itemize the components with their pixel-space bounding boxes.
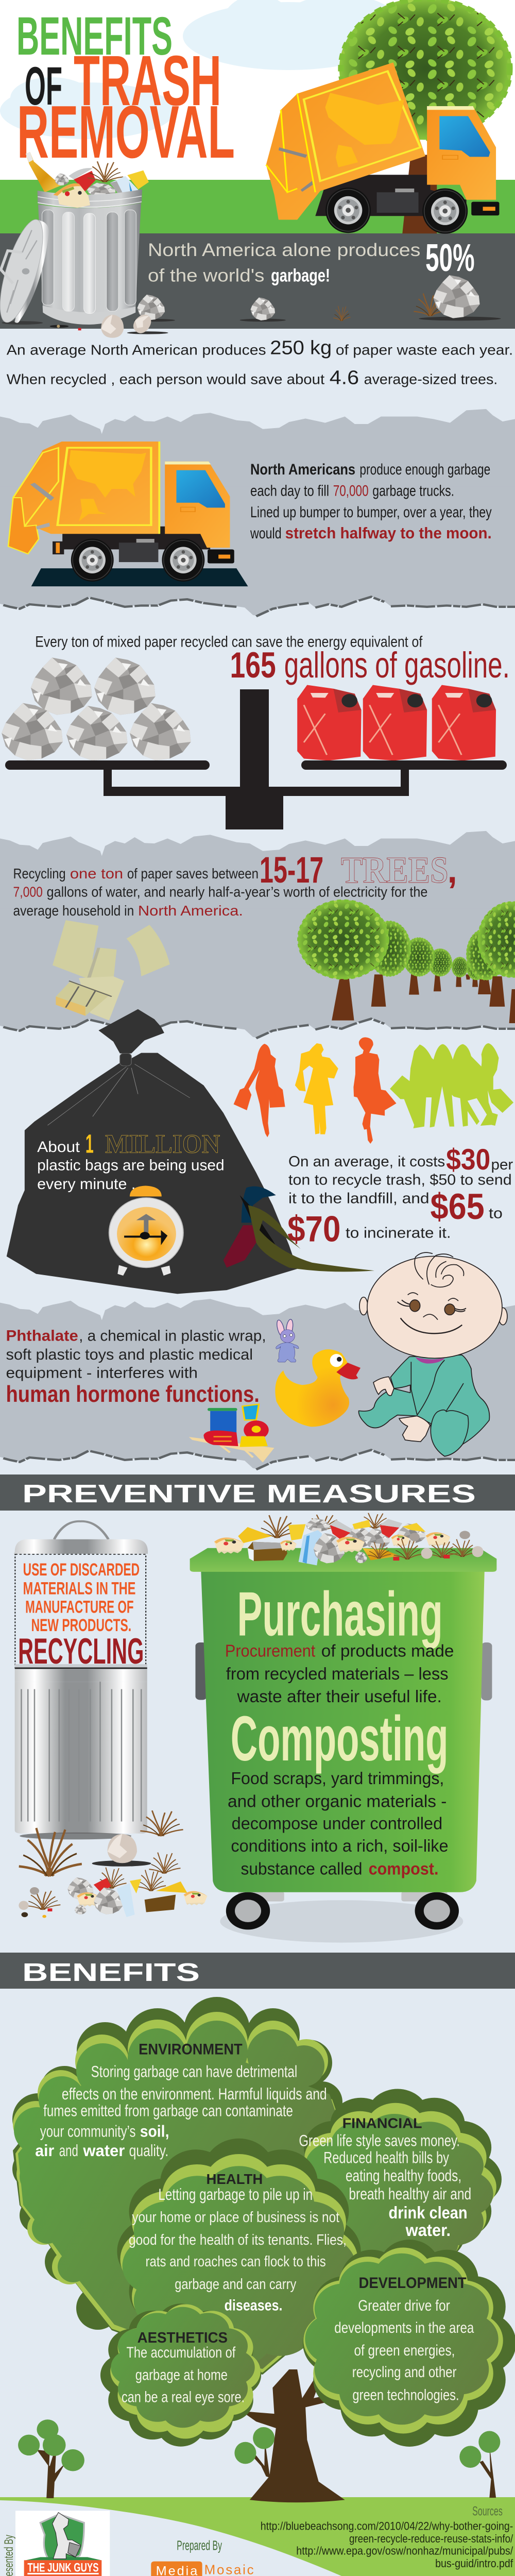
text: phthalate: , a chemical in plastic wrap, (79, 1327, 266, 1344)
text: 1 million plastic bags: plastic bags are being used (37, 1157, 225, 1174)
panel: scale with paper and gasoline (2, 634, 510, 829)
text: health: rats and roaches can flock to this (146, 2253, 326, 2270)
text: cost of disposal: $65 (431, 1187, 485, 1227)
text: environment: soil, (140, 2122, 169, 2141)
green ground band (0, 180, 515, 233)
text: development: Greater drive for (358, 2298, 450, 2314)
canopy: financial (294, 2089, 502, 2274)
text: 165 gallons of gasoline (35, 634, 510, 685)
text: environment: ENVIRONMENT (139, 2041, 243, 2058)
icon: trash can lid (0, 215, 52, 327)
icon: tree trunk (242, 2369, 345, 2502)
text: environment (35, 2041, 327, 2160)
text: composting: substance called (241, 1860, 362, 1878)
litter on road (240, 275, 501, 321)
text: recycling label: NEW PRODUCTS. (31, 1616, 131, 1635)
icon: toy train (189, 1404, 274, 1463)
text: aesthetics (122, 2329, 245, 2405)
text: phthalate: human hormone functions. (6, 1382, 260, 1408)
text: purchasing: from recycled materials – less (226, 1665, 449, 1684)
text: sources (261, 2504, 513, 2570)
text: 50 percent of garbage (148, 236, 475, 285)
text: 70,000 garbage trucks: each day to fill (250, 483, 329, 499)
text: 15-17 trees: Recycling (13, 866, 66, 882)
benefits tree (12, 1997, 515, 2502)
text: health (129, 2171, 347, 2314)
text: development: of green energies, (354, 2343, 455, 2359)
text: cost of disposal: to incinerate it. (346, 1225, 451, 1241)
logo: the junk guys (15, 2511, 110, 2576)
text: 70,000 garbage trucks (250, 461, 492, 542)
text: composting (228, 1703, 449, 1878)
text: phthalate: equipment - interferes with (6, 1364, 198, 1382)
text: cost of disposal: On an average, it costs (288, 1153, 445, 1170)
text: aesthetics: AESTHETICS (138, 2329, 228, 2346)
text: cost of disposal (287, 1143, 513, 1249)
text: 70,000 garbage trucks: would (250, 525, 282, 542)
title: TRASH (74, 41, 221, 121)
text: financial: FINANCIAL (342, 2115, 422, 2131)
text: cost of disposal: $30 (446, 1143, 490, 1176)
text: 165 gallons of gasoline: 165 (230, 646, 276, 685)
logo: media mosaic: Prepared By (177, 2538, 222, 2553)
text: 70,000 garbage trucks: garbage trucks. (372, 483, 454, 499)
text: aesthetics: The accumulation of (127, 2345, 236, 2361)
icon: waste paper (53, 920, 170, 1021)
text: paper waste: 250 kg (270, 337, 332, 359)
heading: preventive measures: PREVENTIVE MEASURES (22, 1480, 476, 1508)
logo: the junk guys: THE JUNK GUYS (27, 2561, 99, 2575)
text: 70,000 garbage trucks: North Americans (250, 461, 355, 478)
text: health: good for the health of its tenants. Flies, (129, 2231, 347, 2248)
text: health: diseases. (225, 2297, 283, 2314)
icon: black garbage bag (7, 1009, 297, 1294)
text: 50 percent of garbage: North America alone produces (148, 240, 420, 260)
text: phthalate (6, 1327, 266, 1408)
icon: alarm clock (109, 1185, 183, 1276)
text: paper waste: An average North American produces (7, 342, 266, 358)
text: composting: Food scraps, yard trimmings, (231, 1769, 444, 1788)
clouds (0, 0, 397, 139)
text: recycling label: USE OF DISCARDED (23, 1560, 140, 1580)
heading: preventive measures (0, 1475, 515, 1511)
icon: baby (359, 1252, 507, 1456)
text: 15-17 trees: average household in (13, 903, 134, 919)
text: recycling label (18, 1560, 144, 1672)
panel: recycling can (14, 1521, 148, 1834)
icon: trash can with garbage (0, 152, 175, 338)
dark road band (0, 233, 515, 329)
icon: small trees (18, 2419, 500, 2498)
text: 15-17 trees (13, 849, 457, 919)
icon: paper ball and eggshells (101, 295, 175, 338)
text: health: garbage and can carry (175, 2276, 296, 2293)
panel: garbage trucks band (0, 409, 515, 616)
text: financial: drink clean (389, 2204, 468, 2223)
icon: heap of garbage (214, 1513, 484, 1565)
text: 1 million plastic bags (37, 1129, 225, 1193)
text: 1 million plastic bags: 1 (85, 1129, 94, 1159)
title (16, 6, 235, 174)
text: cost of disposal: it to the landfill, and (288, 1190, 430, 1207)
text: 70,000 garbage trucks: 70,000 (333, 483, 369, 499)
text: development: DEVELOPMENT (358, 2275, 467, 2292)
panel: green wheelie bin (190, 1548, 496, 1943)
hero illustrations (7, 0, 513, 388)
text: purchasing (225, 1580, 454, 1706)
text: 15-17 trees: 7,000 (13, 885, 43, 900)
icons: shopping women silhouettes (234, 1037, 513, 1144)
text: purchasing: waste after their useful life. (237, 1687, 442, 1706)
text: environment: fumes emitted from garbage can contaminate (43, 2102, 293, 2120)
text: financial (299, 2115, 471, 2240)
panel: recycling paper saves trees (0, 831, 515, 1038)
text: composting: decompose under controlled (232, 1814, 442, 1833)
text: 50 percent of garbage: garbage! (271, 265, 330, 285)
heading: benefits: BENEFITS (22, 1959, 200, 1987)
icon: crumpled paper pile (2, 657, 191, 760)
icon: dropped leaves and fabric (224, 1187, 374, 1272)
text: development: green technologies. (352, 2387, 459, 2403)
canopy: development (303, 2240, 515, 2447)
text: paper waste (7, 337, 513, 388)
text: composting: compost. (369, 1860, 438, 1878)
text: composting: and other organic materials - (228, 1792, 447, 1811)
canopy: aesthetics (100, 2303, 261, 2447)
title: OF (25, 56, 62, 116)
text: health: Letting garbage to pile up in (158, 2185, 313, 2204)
heading: benefits (0, 1953, 515, 1989)
text: 1 million plastic bags: About (37, 1139, 80, 1156)
canopy: health (117, 2139, 361, 2366)
text: aesthetics: can be a real eye sore. (122, 2389, 245, 2405)
text: recycling label: MANUFACTURE OF (25, 1597, 134, 1617)
text: paper waste: 4.6 (330, 367, 359, 388)
panel: phthalate band (0, 1252, 515, 1469)
text: health: HEALTH (207, 2171, 263, 2187)
icon: rubber duck (275, 1349, 360, 1427)
text: RECYCLING (18, 1632, 144, 1672)
text: development: recycling and other (352, 2364, 457, 2381)
text: recycling label: MATERIALS IN THE (23, 1579, 135, 1598)
text: 1 million plastic bags: MILLION (105, 1129, 220, 1159)
text: cost of disposal: to (489, 1205, 503, 1222)
text: environment: quality. (129, 2142, 168, 2160)
text: 1 million plastic bags: every minute . (37, 1176, 135, 1193)
text: development (334, 2275, 474, 2403)
icon: tilted garbage truck (266, 62, 499, 234)
text: health: your home or place of business is not (132, 2209, 339, 2226)
title: REMOVAL (17, 90, 235, 174)
text: aesthetics: garbage at home (135, 2367, 228, 2383)
text: financial: water. (405, 2221, 451, 2240)
text: 15-17 trees: of paper saves between (127, 866, 259, 882)
text: environment: your community’s (40, 2122, 135, 2141)
text: environment: air (35, 2142, 54, 2160)
text: composting: conditions into a rich, soil-like (231, 1837, 449, 1856)
text: purchasing: of products made (321, 1642, 454, 1660)
icon: gasoline cans (297, 685, 496, 760)
text: phthalate: soft plastic toys and plastic medical (6, 1346, 253, 1363)
icon: row of trees (298, 900, 515, 1023)
text: 15-17 trees: one ton (70, 866, 123, 882)
icon: side garbage truck (8, 442, 248, 586)
canopy: environment (12, 1997, 355, 2375)
icon: tree behind truck (339, 0, 511, 233)
icon: toy bunny (276, 1319, 299, 1362)
icon: scattered garbage on floor (19, 1810, 207, 1918)
text: phthalate: Phthalate (6, 1327, 78, 1344)
title: BENEFITS (16, 6, 173, 66)
text: environment: water (83, 2142, 125, 2160)
text: 15-17 trees: 15-17 (260, 849, 323, 890)
text: environment: effects on the environment. Harmful liquids and (62, 2085, 327, 2103)
text: environment: Storing garbage can have detrimental (91, 2062, 297, 2080)
ground hill (0, 2497, 515, 2576)
text: purchasing: Procurement (225, 1642, 316, 1660)
icon: balance scale (5, 689, 507, 829)
text: paper waste: When recycled , each person would save about (7, 371, 324, 387)
text: 50 percent of garbage: of the world's (148, 265, 264, 285)
text: 15-17 trees: , (448, 849, 457, 890)
text: environment: and (59, 2142, 78, 2160)
text: cost of disposal: $70 (287, 1209, 340, 1249)
text: 15-17 trees: North America. (138, 903, 243, 919)
logo: media mosaic (151, 2538, 254, 2576)
hero sky (0, 0, 515, 180)
